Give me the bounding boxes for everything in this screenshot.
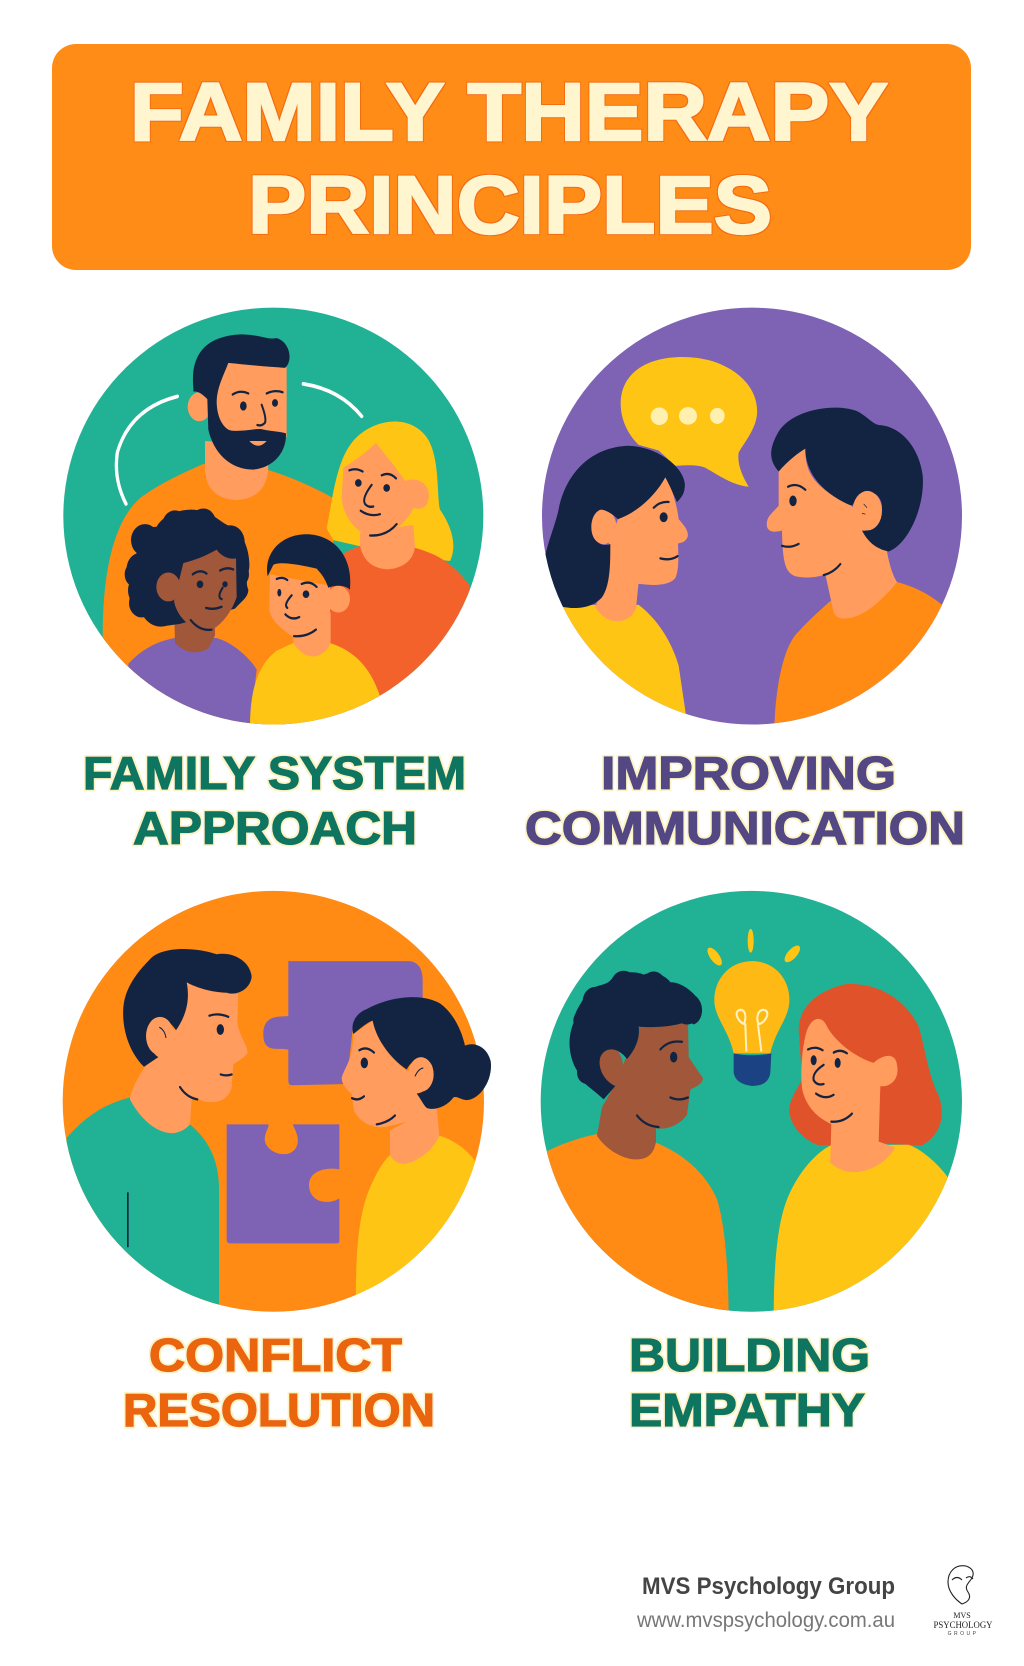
label: improving communication	[525, 747, 965, 854]
person: man	[123, 949, 252, 1133]
label: conflict resolution	[123, 1329, 435, 1436]
label: building empathy: EMPATHY	[629, 1384, 865, 1436]
title text: PRINCIPLES	[248, 160, 772, 251]
label: family system approach	[83, 747, 466, 854]
logo: MVS Psychology Group: PSYCHOLOGY	[934, 1621, 993, 1631]
illustration: two people talking	[542, 308, 962, 724]
icon: light bulb	[705, 929, 802, 1086]
person: woman with bun	[342, 997, 491, 1164]
label: building empathy: BUILDING	[629, 1329, 870, 1381]
panel: family system approach	[50, 296, 497, 854]
panel: building empathy	[529, 881, 979, 1436]
title text: FAMILY THERAPY	[130, 67, 888, 158]
label: family system approach: FAMILY SYSTEM	[83, 747, 466, 799]
logo: MVS Psychology Group	[934, 1566, 993, 1637]
label: conflict resolution: CONFLICT	[149, 1329, 402, 1381]
illustration: two people with puzzle pieces	[50, 881, 500, 1322]
illustration: family of four	[63, 308, 484, 724]
panel: improving communication	[525, 296, 975, 854]
illustration: two people and a light bulb	[540, 890, 962, 1312]
icon: speech bubble	[621, 357, 757, 487]
icon: puzzle pieces	[227, 961, 423, 1243]
label: improving communication: IMPROVING	[601, 747, 896, 799]
footer text: MVS Psychology Group	[642, 1573, 895, 1600]
label: family system approach: APPROACH	[133, 802, 417, 854]
panel: conflict resolution	[50, 881, 500, 1436]
label: building empathy	[629, 1329, 870, 1436]
footer text: www.mvspsychology.com.au	[636, 1609, 895, 1632]
footer text	[636, 1573, 895, 1632]
label: conflict resolution: RESOLUTION	[123, 1384, 435, 1436]
label: improving communication: COMMUNICATION	[525, 802, 965, 854]
logo: MVS Psychology Group: GROUP	[948, 1631, 978, 1637]
title banner	[52, 44, 971, 270]
logo: MVS Psychology Group: MVS	[953, 1611, 971, 1620]
title text	[130, 67, 888, 251]
